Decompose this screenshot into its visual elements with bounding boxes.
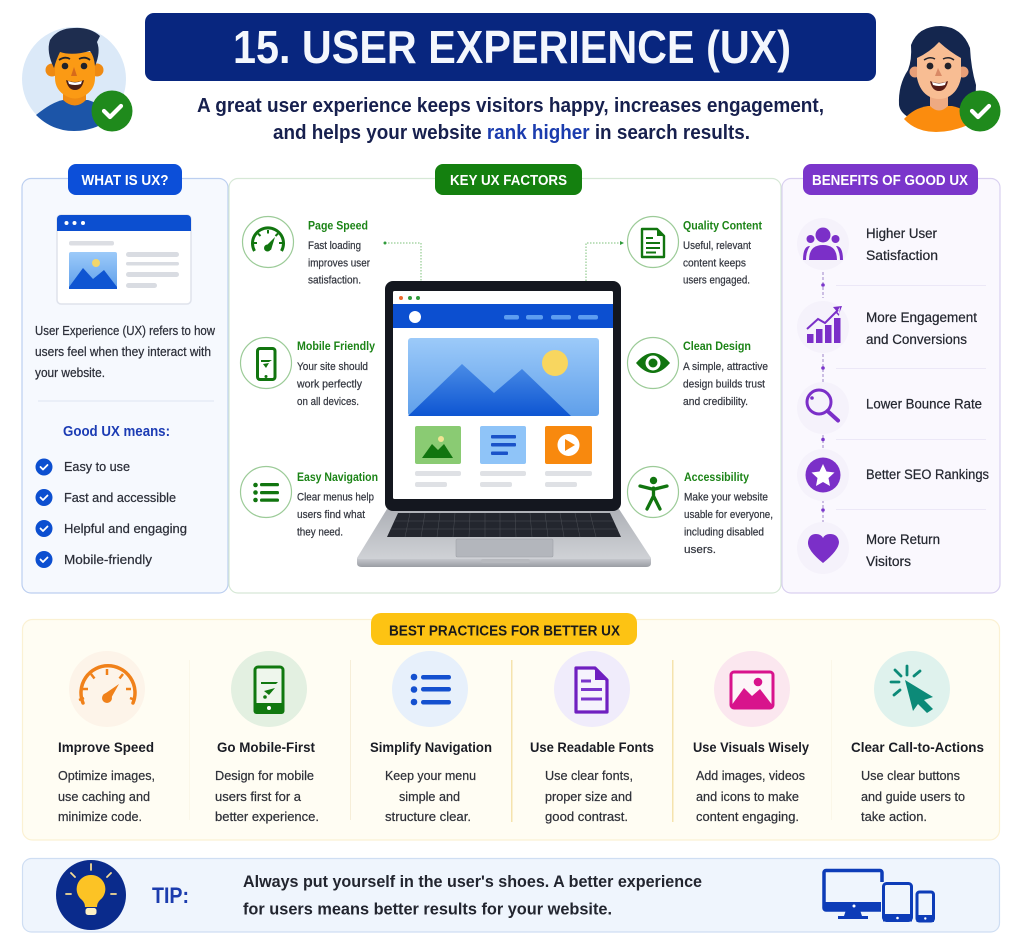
practice: simplify navigation: structure clear.	[385, 809, 471, 824]
practice: improve speed: minimize code.	[58, 809, 142, 824]
panel: what is UX	[22, 164, 228, 593]
factor: mobile friendly: on all devices.	[297, 396, 359, 408]
factor: quality content	[628, 216, 762, 286]
illustration: laptop	[357, 281, 651, 567]
label: tip: TIP:	[152, 883, 189, 908]
subtitle	[197, 95, 824, 144]
factor: page speed: improves user	[308, 258, 370, 270]
factor: mobile friendly: Your site should	[297, 361, 368, 373]
heading: benefits of good UX	[803, 164, 978, 195]
benefit: more engagement and conversions: More Engagement	[866, 310, 977, 325]
benefit: more return visitors	[797, 522, 940, 574]
timeline connectors	[821, 272, 986, 522]
practice: use readable fonts: Use clear fonts,	[545, 768, 633, 783]
practice: use visuals wisely: content engaging.	[696, 809, 799, 824]
connector: laptop to quality content	[586, 241, 624, 281]
factor: page speed: Page Speed	[308, 220, 368, 232]
practice: go mobile-first: better experience.	[215, 809, 319, 824]
connector: page speed to laptop	[384, 242, 421, 281]
factor: accessibility: usable for everyone,	[684, 509, 773, 521]
factor: quality content: users engaged.	[683, 274, 750, 286]
factor: clean design: Clean Design	[683, 341, 751, 353]
practice: use visuals wisely: and icons to make	[696, 789, 799, 804]
factor: clean design: A simple, attractive	[683, 361, 768, 373]
practice: go mobile-first	[215, 651, 319, 824]
practice: clear call-to-actions: and guide users to	[861, 789, 965, 804]
practice: use visuals wisely: Add images, videos	[696, 768, 805, 783]
practice: go mobile-first: users first for a	[215, 789, 302, 804]
avatar: woman with check badge	[899, 26, 1000, 132]
badge: check	[92, 90, 132, 132]
benefit: more engagement and conversions	[797, 301, 977, 353]
factor: page speed: satisfaction.	[308, 274, 361, 286]
benefit: higher user satisfaction: Higher User	[866, 226, 937, 241]
benefit: lower bounce rate: Lower Bounce Rate	[866, 396, 982, 412]
factor: page speed	[242, 216, 370, 286]
checklist: Helpful and engaging	[64, 522, 187, 536]
checklist: Easy to use	[64, 460, 130, 474]
text: UX definition: users feel when they interact with	[35, 345, 211, 359]
heading: what is UX	[68, 164, 182, 195]
factor: clean design: design builds trust	[683, 378, 765, 390]
factor: accessibility: users.	[684, 544, 716, 556]
tip text	[243, 873, 702, 918]
factor: clean design: and credibility.	[683, 396, 748, 408]
factor: accessibility: Accessibility	[684, 472, 750, 484]
heading: key UX factors	[435, 164, 582, 195]
practice: improve speed: Improve Speed	[58, 740, 154, 755]
laptop base	[357, 509, 651, 567]
title banner: 15. USER EXPERIENCE (UX)	[233, 21, 791, 73]
heading: what is UX: WHAT IS UX?	[82, 173, 169, 189]
practice: clear call-to-actions: take action.	[861, 809, 927, 824]
tip text: Always put yourself in the user's shoes. A better experience	[243, 873, 702, 891]
practice: use readable fonts	[530, 651, 654, 824]
text: UX definition	[35, 324, 216, 380]
practice: simplify navigation: simple and	[399, 789, 460, 804]
badge: check	[960, 90, 1000, 132]
icon: devices	[824, 870, 934, 922]
practice: go mobile-first: Design for mobile	[215, 768, 314, 783]
practice: clear call-to-actions: Use clear buttons	[861, 768, 960, 783]
benefit: better SEO rankings: Better SEO Rankings	[866, 467, 989, 482]
practice: use readable fonts: Use Readable Fonts	[530, 740, 654, 755]
icon: light bulb	[56, 860, 126, 930]
factor: mobile friendly	[240, 338, 376, 408]
factor: accessibility: including disabled	[684, 526, 764, 538]
laptop screen	[385, 281, 621, 511]
benefit: more engagement and conversions: and Conversions	[866, 332, 967, 347]
practice: use visuals wisely: Use Visuals Wisely	[693, 740, 809, 755]
factor: easy navigation: they need.	[297, 526, 343, 538]
factor: accessibility	[628, 466, 773, 556]
heading: key UX factors: KEY UX FACTORS	[450, 173, 567, 189]
practice: use readable fonts: proper size and	[545, 789, 632, 804]
factor: clean design	[628, 338, 768, 408]
practice: simplify navigation: Keep your menu	[385, 768, 476, 783]
heading: best practices	[371, 613, 637, 645]
title banner	[145, 13, 876, 81]
factor: accessibility: Make your website	[684, 492, 768, 504]
factor: mobile friendly: work perfectly	[296, 378, 362, 390]
benefit: lower bounce rate	[797, 382, 982, 434]
benefit: better SEO rankings	[797, 449, 989, 501]
factor: quality content: Quality Content	[683, 220, 762, 232]
practice: use readable fonts: good contrast.	[545, 809, 628, 824]
practice: improve speed: Optimize images,	[58, 768, 155, 783]
practice: simplify navigation: Simplify Navigation	[370, 740, 492, 755]
checklist: Mobile-friendly	[64, 553, 153, 567]
benefit: higher user satisfaction	[797, 218, 938, 270]
checklist	[36, 458, 187, 568]
subtitle: and helps your website rank higher in search results.	[273, 122, 750, 144]
panel: key UX factors	[229, 164, 781, 593]
illustration: browser window	[57, 215, 191, 304]
heading: best practices: BEST PRACTICES FOR BETTER UX	[389, 624, 620, 640]
factor: easy navigation	[240, 466, 378, 538]
subtitle: A great user experience keeps visitors happy, increases engagement,	[197, 95, 824, 117]
tip text: for users means better results for your website.	[243, 900, 612, 918]
factor: easy navigation: Clear menus help	[297, 492, 374, 504]
practice: simplify navigation	[370, 651, 492, 824]
benefit: more return visitors: Visitors	[866, 554, 911, 569]
factor: quality content: content keeps	[683, 258, 746, 270]
practice: clear call-to-actions	[851, 651, 984, 824]
factor: page speed: Fast loading	[308, 240, 361, 252]
heading: good UX means: Good UX means:	[63, 424, 170, 440]
practice: improve speed: use caching and	[58, 789, 150, 804]
practice: go mobile-first: Go Mobile-First	[217, 740, 315, 755]
heading: benefits of good UX: BENEFITS OF GOOD UX	[812, 173, 968, 189]
benefit: higher user satisfaction: Satisfaction	[866, 248, 938, 263]
benefit: more return visitors: More Return	[866, 532, 940, 547]
factor: quality content: Useful, relevant	[683, 240, 751, 252]
panel: benefits of good UX	[782, 164, 1000, 593]
factor: mobile friendly: Mobile Friendly	[297, 341, 376, 353]
tip bar	[22, 858, 1000, 932]
avatar: man with check badge	[22, 27, 132, 132]
panel: best practices	[22, 613, 1000, 840]
checklist: Fast and accessible	[64, 491, 176, 505]
text: UX definition: User Experience (UX) refers to how	[35, 324, 216, 338]
practice: use visuals wisely	[693, 651, 809, 824]
practice: clear call-to-actions: Clear Call-to-Actions	[851, 740, 984, 755]
practice: improve speed	[58, 651, 155, 824]
factor: easy navigation: Easy Navigation	[297, 472, 378, 484]
factor: easy navigation: users find what	[297, 509, 365, 521]
text: UX definition: your website.	[35, 366, 105, 380]
